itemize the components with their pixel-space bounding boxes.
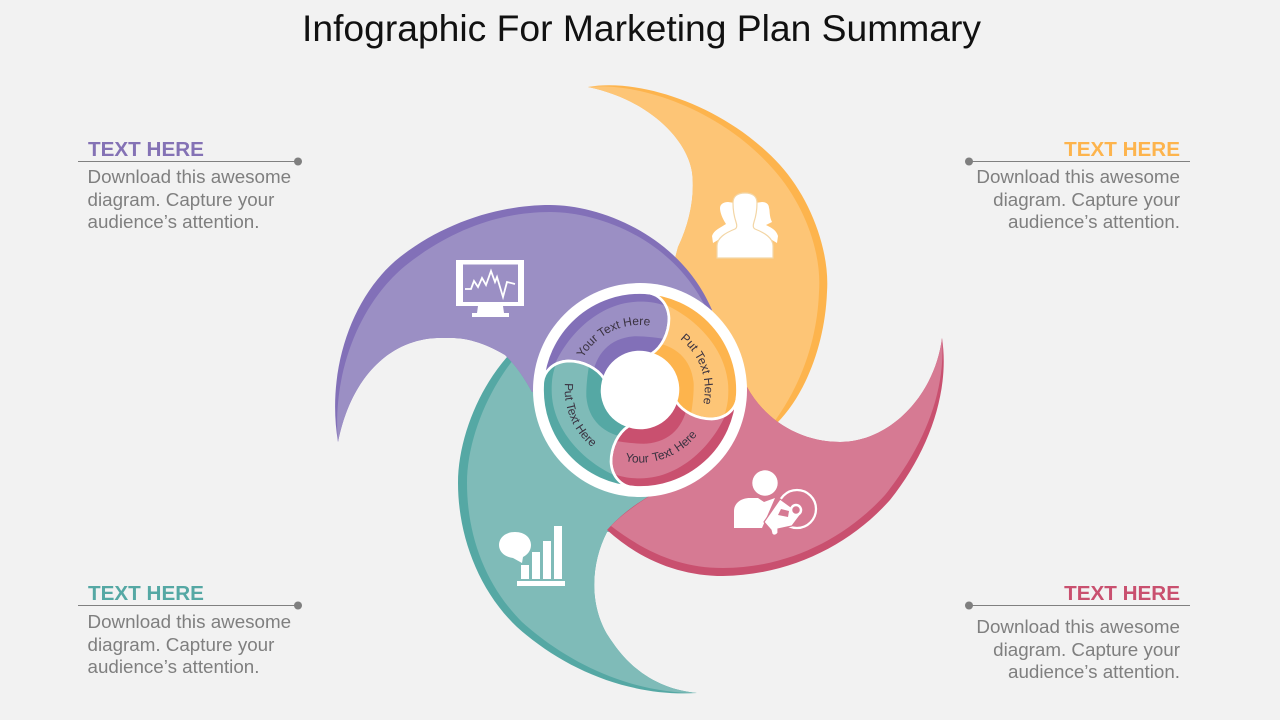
icon: people	[712, 193, 778, 258]
callout: bottom left	[78, 582, 302, 677]
segment: pink	[603, 395, 737, 487]
title: Infographic For Marketing Plan Summary	[302, 7, 981, 49]
callout: bottom left: diagram. Capture your	[88, 634, 274, 655]
callout: bottom left: Download this awesome	[88, 611, 291, 632]
callout: top left: audience’s attention.	[88, 211, 259, 232]
curved label: teal: Put Text Here	[564, 384, 596, 446]
ring segments	[543, 293, 737, 487]
petal: purple	[335, 205, 712, 442]
curved label: pink: Your Text Here	[626, 432, 696, 463]
callout: bottom left: TEXT HERE	[88, 582, 204, 605]
callout: top right: TEXT HERE	[1064, 138, 1180, 161]
segment: teal	[543, 353, 635, 487]
callout: top right: audience’s attention.	[1008, 211, 1180, 232]
petal: pink	[607, 338, 944, 576]
callout: top right: diagram. Capture your	[993, 189, 1180, 210]
center circle	[602, 352, 678, 428]
callout: bottom right: audience’s attention.	[1008, 661, 1180, 682]
curved label: purple: Your Text Here	[576, 317, 650, 356]
callout: bottom right	[965, 582, 1190, 682]
callout: bottom right: Download this awesome	[976, 616, 1180, 637]
callout: top left: TEXT HERE	[88, 138, 204, 161]
callout: bottom right: TEXT HERE	[1064, 582, 1180, 605]
curved label: orange: Put Text Here	[680, 333, 713, 404]
petal: teal	[458, 357, 700, 693]
segment: orange	[645, 293, 737, 427]
icon: person with megaphone	[734, 470, 816, 535]
icon: bar chart with speech bubble	[499, 526, 565, 586]
center ring	[533, 283, 747, 497]
callout: top right: Download this awesome	[976, 166, 1180, 187]
callout: top left: Download this awesome	[88, 166, 291, 187]
callout: bottom left: audience’s attention.	[88, 656, 259, 677]
callout: top right	[965, 138, 1190, 232]
callout: top left	[78, 138, 302, 232]
petal: orange	[588, 85, 827, 430]
icon: monitor	[456, 260, 524, 317]
segment: purple	[546, 294, 668, 376]
callout: bottom right: diagram. Capture your	[993, 639, 1180, 660]
callout: top left: diagram. Capture your	[88, 189, 274, 210]
